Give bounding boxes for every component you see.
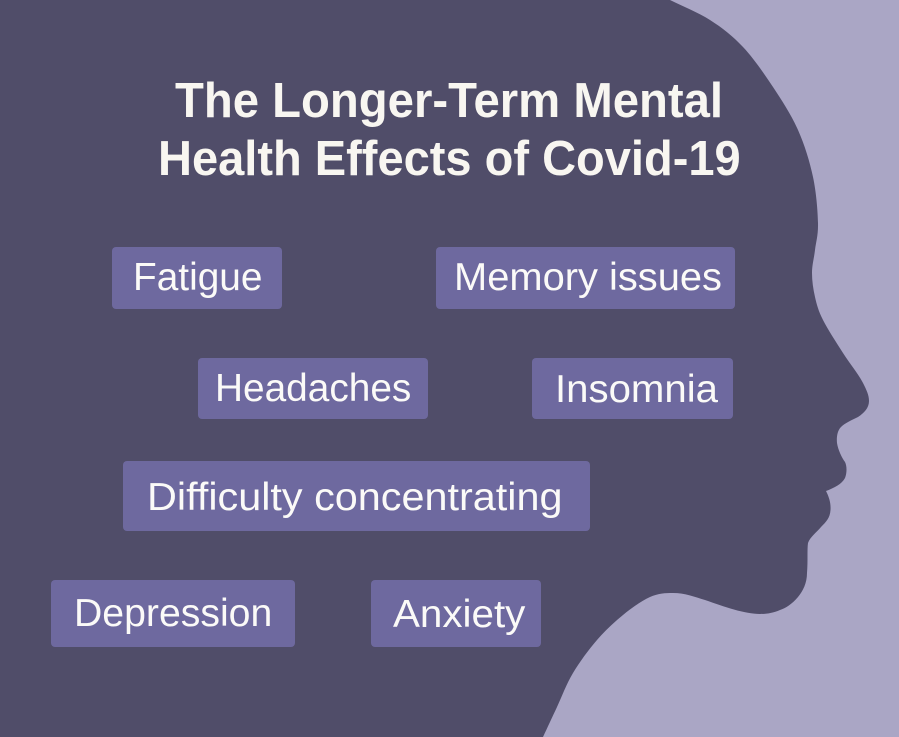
tag: Anxiety: Anxiety xyxy=(393,593,525,636)
tag: Memory issues xyxy=(436,247,735,309)
tag: Depression: Depression xyxy=(74,592,272,635)
title: Health Effects of Covid-19 xyxy=(158,131,740,186)
title: The Longer-Term Mental xyxy=(175,73,723,128)
tag: Insomnia: Insomnia xyxy=(555,368,718,411)
tag: Insomnia xyxy=(532,358,733,419)
tag: Difficulty concentrating xyxy=(123,461,590,530)
tag: Anxiety xyxy=(370,580,541,646)
tag: Difficulty concentrating: Difficulty concentrating xyxy=(147,476,563,519)
tag: Depression xyxy=(51,580,294,647)
tag: Memory issues: Memory issues xyxy=(454,256,722,299)
tag: Fatigue: Fatigue xyxy=(133,256,262,299)
tag: Headaches: Headaches xyxy=(214,367,411,410)
tag: Headaches xyxy=(198,358,428,419)
title xyxy=(158,73,740,186)
tag: Fatigue xyxy=(112,247,282,309)
